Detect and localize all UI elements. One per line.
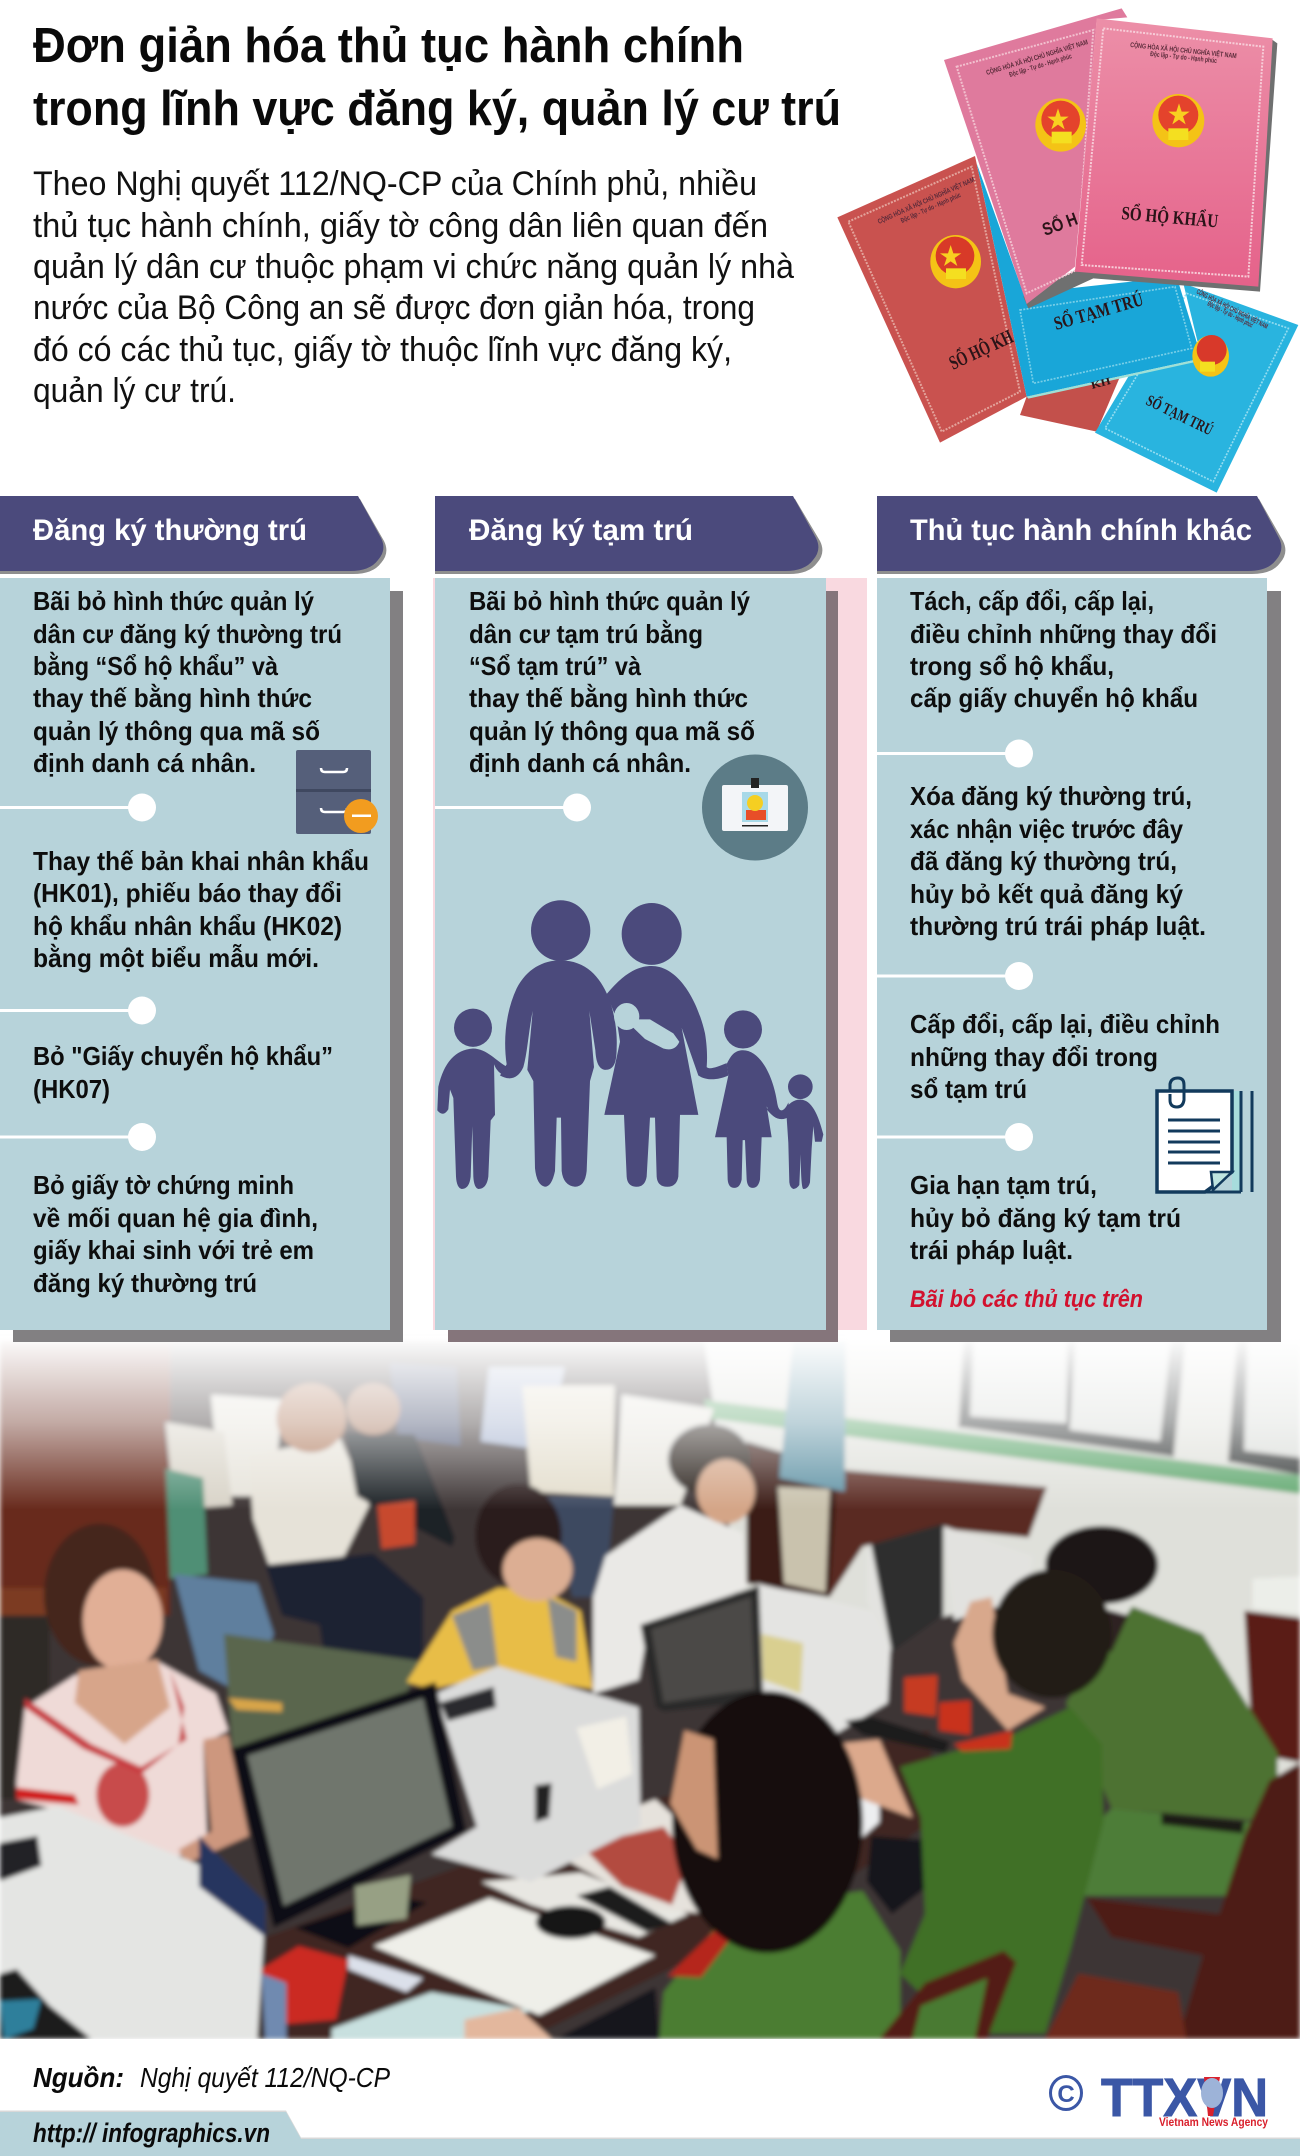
panel: Thủ tục hành chính khác xyxy=(877,496,1285,1342)
header: column 1 xyxy=(0,496,386,574)
item: Sổ hộ khẩu: định danh cá nhân. xyxy=(33,748,256,778)
item: giấy tờ chứng minh xyxy=(33,1170,318,1298)
item: Sổ tạm trú xyxy=(469,586,755,778)
book labels: CỘNG HÒA XÃ HỘI CHỦ NGHĨA VIỆT NAM xyxy=(1130,40,1237,60)
item: xóa đăng ký thường trú: Xóa đăng ký thường trú, xyxy=(910,781,1192,811)
item: xóa đăng ký thường trú: đã đăng ký thường trú, xyxy=(910,846,1177,876)
book labels: Độc lập - Tự do - Hạnh phúc xyxy=(1009,53,1073,79)
item: Sổ tạm trú: “Sổ tạm trú” và xyxy=(469,651,641,681)
book labels: SỔ H xyxy=(1039,208,1080,240)
item: sổ tạm trú thủ tục: Cấp đổi, cấp lại, điều chỉnh xyxy=(910,1009,1220,1039)
item: giấy tờ chứng minh: giấy khai sinh với trẻ em xyxy=(33,1235,314,1265)
photo: citizens registering with police officers xyxy=(0,1335,1300,2044)
item: Sổ tạm trú: dân cư tạm trú bằng xyxy=(469,619,703,649)
callout: abolished procedures: Bãi bỏ các thủ tục trên xyxy=(910,1286,1143,1313)
illustration: household and temporary residence books xyxy=(837,8,1298,493)
panel body xyxy=(0,578,390,1330)
panel: Đăng ký tạm trú xyxy=(435,496,838,1342)
panel shadow xyxy=(13,591,403,1342)
item: Sổ hộ khẩu: bằng “Sổ hộ khẩu” và xyxy=(33,651,278,681)
panel body xyxy=(877,578,1267,1330)
emblem: pink left xyxy=(1035,98,1086,152)
item: giấy tờ chứng minh: đăng ký thường trú xyxy=(33,1268,257,1298)
item: sổ hộ khẩu thủ tục: điều chỉnh những thay đổi xyxy=(910,619,1217,649)
item: HK07 xyxy=(33,1041,333,1104)
item: sổ hộ khẩu thủ tục xyxy=(910,586,1217,713)
illustration: family silhouette xyxy=(437,900,823,1189)
title xyxy=(33,19,841,136)
item: sổ tạm trú thủ tục xyxy=(910,1009,1220,1104)
item: xóa đăng ký thường trú: xác nhận việc trước đây xyxy=(910,814,1183,844)
logo: TTXVN: Vietnam News Agency xyxy=(1159,2115,1268,2129)
icon: file drawer with minus xyxy=(296,750,378,834)
emblem: red book xyxy=(930,235,981,288)
intro text block: Theo Nghị quyết 112/NQ-CP của Chính phủ, nhiều xyxy=(33,165,757,203)
book labels xyxy=(876,37,1270,439)
intro text block: thủ tục hành chính, giấy tờ công dân liên quan đến xyxy=(33,207,768,245)
item: Sổ tạm trú: thay thế bằng hình thức xyxy=(469,683,748,713)
item: HK01 HK02 xyxy=(33,846,369,973)
item: gia hạn tạm trú xyxy=(910,1170,1181,1265)
item: sổ tạm trú thủ tục: những thay đổi trong xyxy=(910,1042,1158,1072)
header: column 2 xyxy=(435,496,822,574)
logo: TTXVN: TTXVN xyxy=(1101,2068,1268,2128)
item: xóa đăng ký thường trú: hủy bỏ kết quả đăng ký xyxy=(910,879,1184,909)
panel body xyxy=(435,578,826,1330)
item: sổ hộ khẩu thủ tục: Tách, cấp đổi, cấp lại, xyxy=(910,586,1154,616)
item: HK01 HK02: Thay thế bản khai nhân khẩu xyxy=(33,846,369,876)
item: Sổ hộ khẩu xyxy=(33,586,342,778)
top white fade xyxy=(0,1335,1300,1510)
item: sổ hộ khẩu thủ tục: cấp giấy chuyển hộ khẩu xyxy=(910,683,1198,713)
panel: Đăng ký thường trú xyxy=(0,496,403,1342)
book labels: CỘNG HÒA XÃ HỘI CHỦ NGHĨA VIỆT NAM xyxy=(876,175,976,226)
item: HK01 HK02: bằng một biểu mẫu mới. xyxy=(33,943,319,973)
book labels: CỘNG HÒA XÃ HỘI CHỦ NGHĨA VIỆT NAM xyxy=(985,37,1089,77)
item: Sổ hộ khẩu: quản lý thông qua mã số xyxy=(33,716,320,746)
header: column 3: Thủ tục hành chính khác xyxy=(910,514,1252,547)
emblem: blue book xyxy=(1192,335,1229,377)
item: Sổ hộ khẩu: dân cư đăng ký thường trú xyxy=(33,619,342,649)
intro text block: quản lý cư trú. xyxy=(33,372,236,410)
header: column 2: Đăng ký tạm trú xyxy=(469,514,693,547)
footer band xyxy=(0,2110,1300,2156)
source: Nghị quyết 112/NQ-CP xyxy=(140,2062,390,2093)
item: sổ tạm trú thủ tục: sổ tạm trú xyxy=(910,1074,1027,1104)
item: giấy tờ chứng minh: về mối quan hệ gia đình, xyxy=(33,1203,318,1233)
panel shadow xyxy=(890,591,1281,1342)
pink background behind middle column xyxy=(433,578,867,1330)
item: Sổ tạm trú: Bãi bỏ hình thức quản lý xyxy=(469,586,750,616)
intro text block: nước của Bộ Công an sẽ được đơn giản hóa, trong xyxy=(33,289,755,327)
book labels: SỔ TẠM TRÚ xyxy=(1143,390,1217,439)
icon: clipped document xyxy=(1157,1078,1252,1192)
intro text block: đó có các thủ tục, giấy tờ thuộc lĩnh vực đăng ký, xyxy=(33,331,732,369)
book labels: Độc lập - Tự do - Hạnh phúc xyxy=(1150,51,1217,65)
book labels: SỔ HỘ KH xyxy=(945,324,1017,375)
item: xóa đăng ký thường trú xyxy=(910,781,1206,941)
title: trong lĩnh vực đăng ký, quản lý cư trú xyxy=(33,82,841,136)
copyright mark xyxy=(1050,2076,1082,2110)
item: HK07: Bỏ "Giấy chuyển hộ khẩu” xyxy=(33,1041,333,1071)
item: Sổ hộ khẩu: thay thế bằng hình thức xyxy=(33,683,312,713)
copyright mark: C xyxy=(1057,2081,1075,2108)
item: Sổ tạm trú: quản lý thông qua mã số xyxy=(469,716,755,746)
item: gia hạn tạm trú: trái pháp luật. xyxy=(910,1235,1073,1265)
emblem: pink right xyxy=(1152,94,1204,147)
book labels: SỔ HỘ KHẨU xyxy=(1121,202,1219,232)
source xyxy=(33,2062,390,2093)
website url: http:// infographics.vn xyxy=(33,2118,270,2148)
item: HK07: (HK07) xyxy=(33,1074,110,1104)
book labels: KH xyxy=(1090,376,1112,392)
book labels: SỔ TẠM TRÚ xyxy=(1051,288,1146,335)
item: gia hạn tạm trú: hủy bỏ đăng ký tạm trú xyxy=(910,1203,1181,1233)
item: Sổ tạm trú: định danh cá nhân. xyxy=(469,748,691,778)
header: column 1: Đăng ký thường trú xyxy=(33,514,307,547)
intro text block xyxy=(33,165,794,410)
title: Đơn giản hóa thủ tục hành chính xyxy=(33,19,744,73)
item: sổ hộ khẩu thủ tục: trong sổ hộ khẩu, xyxy=(910,651,1114,681)
intro text block: quản lý dân cư thuộc phạm vi chức năng quản lý nhà xyxy=(33,248,794,286)
panel shadow xyxy=(448,591,838,1342)
item: Sổ hộ khẩu: Bãi bỏ hình thức quản lý xyxy=(33,586,314,616)
item: gia hạn tạm trú: Gia hạn tạm trú, xyxy=(910,1170,1097,1200)
item: xóa đăng ký thường trú: thường trú trái pháp luật. xyxy=(910,911,1206,941)
item: HK01 HK02: hộ khẩu nhân khẩu (HK02) xyxy=(33,911,342,941)
book labels: Độc lập - Tự do - Hạnh phúc xyxy=(900,192,962,225)
item: giấy tờ chứng minh: Bỏ giấy tờ chứng minh xyxy=(33,1170,294,1200)
book labels: Độc lập - Tự do - Hạnh phúc xyxy=(1206,301,1254,330)
header: column 3 xyxy=(877,496,1285,574)
source: Nguồn: xyxy=(33,2062,124,2093)
icon: ID badge xyxy=(702,754,808,860)
item: HK01 HK02: (HK01), phiếu báo thay đổi xyxy=(33,878,342,908)
